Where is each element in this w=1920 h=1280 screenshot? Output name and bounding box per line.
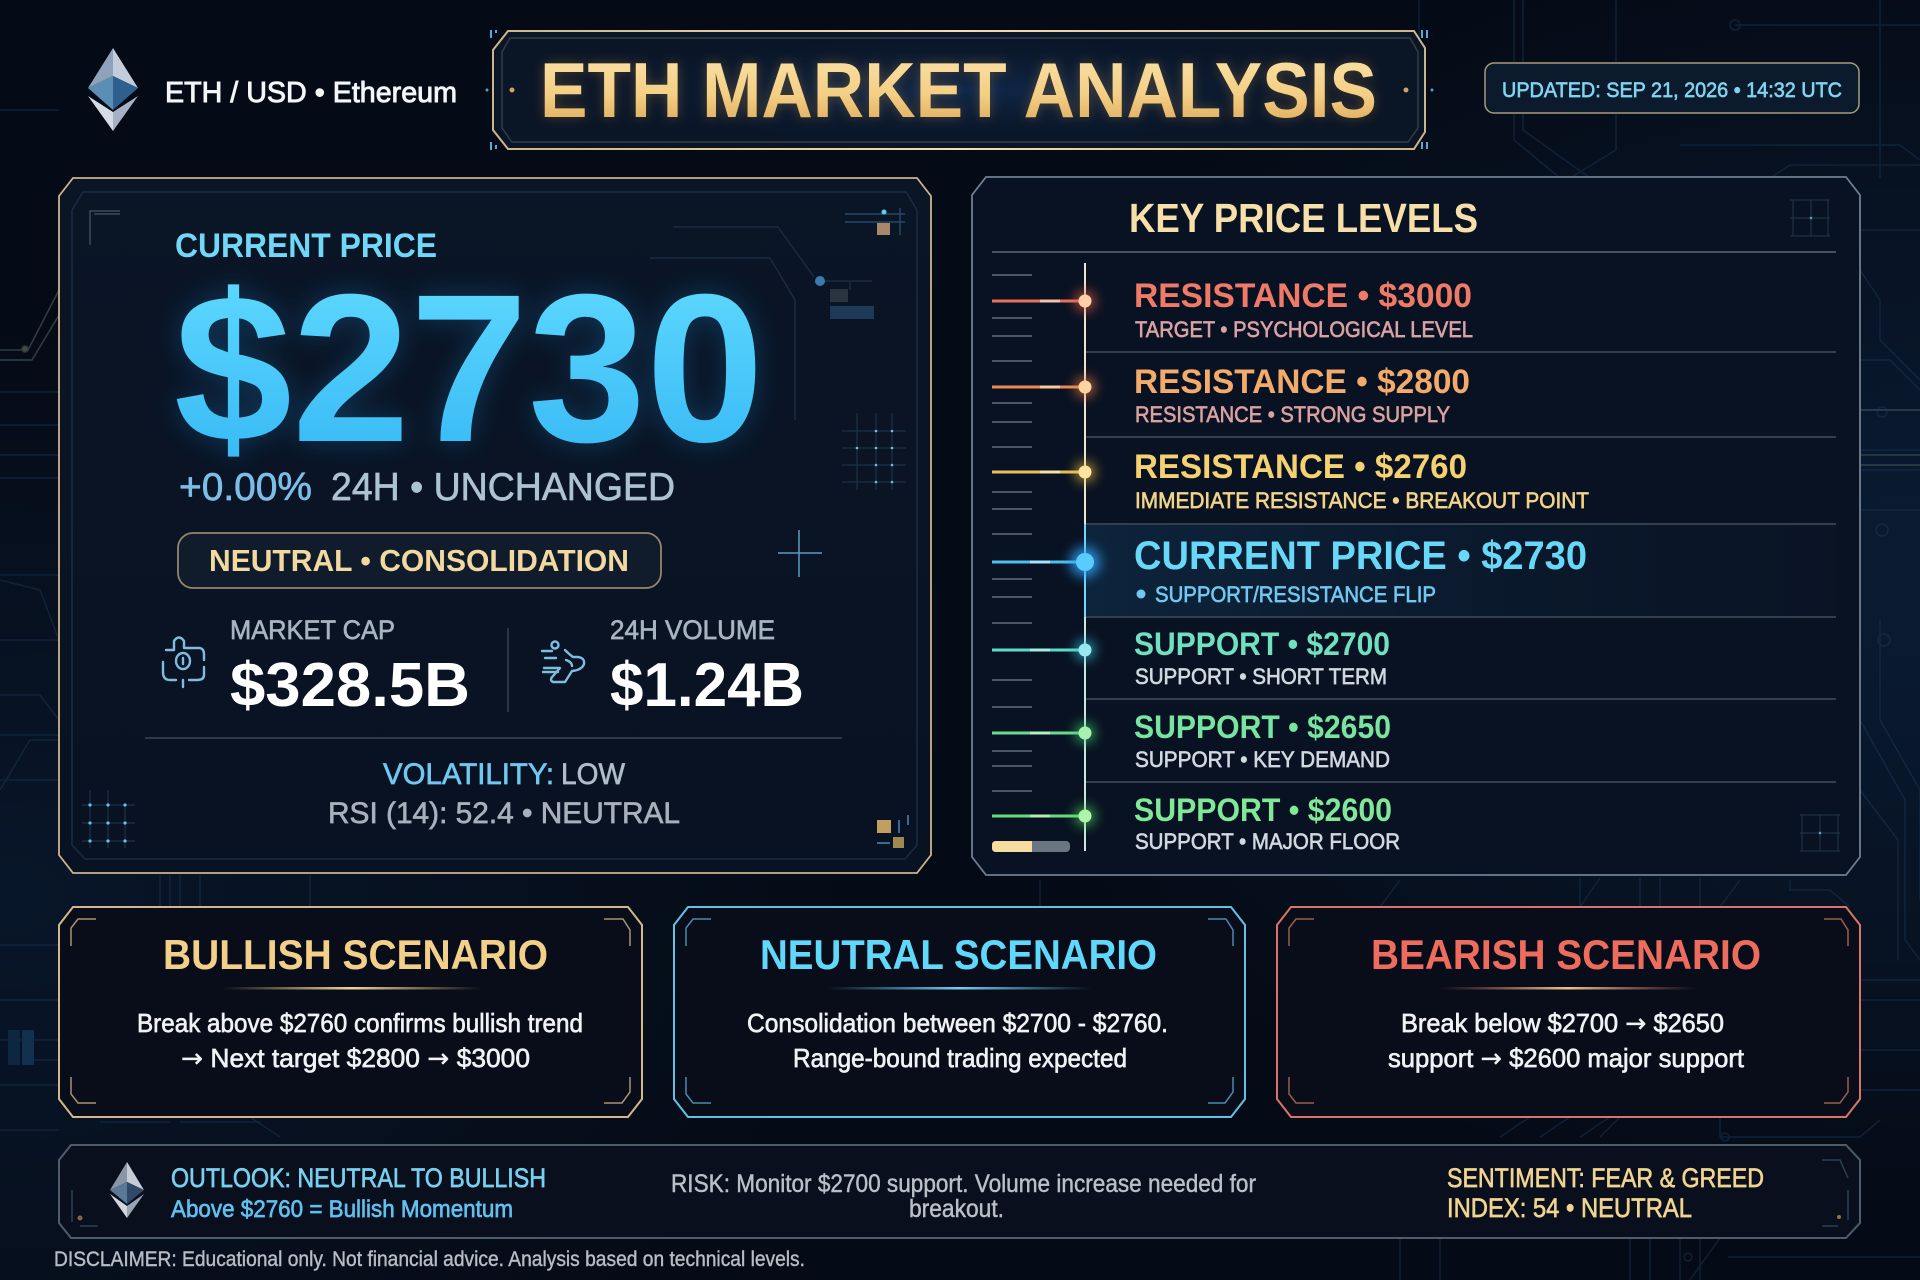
outlook text: Above $2760 = Bullish Momentum <box>171 1196 513 1223</box>
level: resistance 3000: RESISTANCE • $3000 <box>1134 277 1472 315</box>
level: current price: CURRENT PRICE • $2730 <box>1134 534 1587 578</box>
corner brackets <box>1289 919 1848 1103</box>
sentiment text: SENTIMENT: FEAR & GREED <box>1447 1163 1764 1193</box>
current row highlight <box>1086 524 1836 617</box>
badge: neutral consolidation: NEUTRAL • CONSOLIDATION <box>209 543 629 578</box>
sentiment text: INDEX: 54 • NEUTRAL <box>1447 1193 1692 1223</box>
level: resistance 2760 <box>992 448 1589 513</box>
icon: small Ethereum diamond <box>110 1162 144 1218</box>
market cap metric: $328.5B <box>230 651 470 720</box>
level: resistance 2800: RESISTANCE • STRONG SUPPLY <box>1135 402 1450 427</box>
level: support 2700: SUPPORT • $2700 <box>1134 626 1390 662</box>
title banner: ETH MARKET ANALYSIS <box>540 46 1377 134</box>
level: current price: SUPPORT/RESISTANCE FLIP <box>1155 582 1436 607</box>
body text: → Next target $2800 → $3000 <box>181 1043 530 1074</box>
level: support 2700 <box>992 626 1390 689</box>
price ladder ticks <box>992 275 1032 791</box>
range progress bar <box>992 841 1070 852</box>
level: resistance 2800 <box>992 363 1470 427</box>
title text: ETH MARKET ANALYSIS <box>540 46 1377 134</box>
heading: BULLISH SCENARIO <box>163 931 548 978</box>
24h change: +0.00% <box>179 466 312 509</box>
panel: outlook bar <box>59 1145 1860 1238</box>
updated timestamp badge <box>1485 63 1859 113</box>
label: current price: CURRENT PRICE <box>175 227 437 265</box>
outlook text <box>171 1163 546 1223</box>
risk text: breakout. <box>909 1195 1004 1223</box>
panel: neutral scenario <box>674 907 1245 1117</box>
level: support 2700: SUPPORT • SHORT TERM <box>1135 664 1387 689</box>
24h volume metric: $1.24B <box>610 651 804 720</box>
heading: BEARISH SCENARIO <box>1371 931 1761 978</box>
icon: market cap <box>163 638 204 687</box>
body text: Break above $2760 confirms bullish trend <box>137 1008 583 1038</box>
corner brackets <box>686 919 1233 1103</box>
level: support 2650: SUPPORT • $2650 <box>1134 709 1391 745</box>
row dividers <box>1085 352 1836 782</box>
level: current price <box>992 534 1587 607</box>
disclaimer: DISCLAIMER: Educational only. Not financial advice. Analysis based on technical levels. <box>54 1248 805 1271</box>
pair label: ETH / USD • Ethereum <box>165 77 457 109</box>
body text: Range-bound trading expected <box>793 1043 1127 1073</box>
panel: key price levels <box>972 177 1860 875</box>
24h volume metric: 24H VOLUME <box>610 615 775 645</box>
updated timestamp badge: UPDATED: SEP 21, 2026 • 14:32 UTC <box>1502 78 1842 102</box>
risk text: RISK: Monitor $2700 support. Volume increase needed for <box>671 1170 1256 1198</box>
RSI: RSI (14): 52.4 • NEUTRAL <box>328 797 680 830</box>
volatility: VOLATILITY: <box>383 758 554 791</box>
level: support 2650: SUPPORT • KEY DEMAND <box>1135 747 1390 772</box>
24h volume metric <box>610 615 804 720</box>
body text <box>747 1008 1168 1073</box>
level: support 2600: SUPPORT • $2600 <box>1134 792 1392 828</box>
body text <box>1388 1008 1745 1074</box>
risk text <box>671 1170 1256 1223</box>
24h change <box>179 466 675 509</box>
icon: volume <box>542 642 584 682</box>
divider between metrics <box>507 628 509 712</box>
panel decorations <box>82 208 908 848</box>
bar decorations <box>72 1160 1848 1226</box>
level: resistance 2800: RESISTANCE • $2800 <box>1134 363 1470 401</box>
body text: support → $2600 major support <box>1388 1043 1745 1074</box>
decorative grids <box>1790 200 1840 851</box>
level: resistance 3000 <box>992 277 1473 342</box>
outlook text: OUTLOOK: NEUTRAL TO BULLISH <box>171 1163 546 1193</box>
icon: Ethereum diamond <box>88 48 138 131</box>
price ladder axis <box>1084 263 1086 851</box>
panel: bullish scenario <box>59 907 642 1117</box>
level: support 2600 <box>992 792 1400 854</box>
header: ETH logo and pair label <box>88 48 457 131</box>
level: support 2600: SUPPORT • MAJOR FLOOR <box>1135 829 1400 854</box>
panel heading: KEY PRICE LEVELS <box>1129 195 1478 241</box>
corner brackets <box>71 919 630 1103</box>
decorative crosshair <box>778 530 822 577</box>
level: support 2650 <box>992 709 1391 772</box>
market cap metric: MARKET CAP <box>230 615 395 645</box>
24h change: 24H • UNCHANGED <box>331 466 675 509</box>
level: resistance 3000: TARGET • PSYCHOLOGICAL LEVEL <box>1135 317 1473 342</box>
big price: $2730 <box>174 250 764 486</box>
sentiment text <box>1447 1163 1764 1223</box>
panel: bearish scenario <box>1277 907 1860 1117</box>
body text: Break below $2700 → $2650 <box>1401 1008 1724 1039</box>
body text: Consolidation between $2700 - $2760. <box>747 1008 1168 1038</box>
body text <box>137 1008 583 1074</box>
level: resistance 2760: RESISTANCE • $2760 <box>1134 448 1467 486</box>
heading: NEUTRAL SCENARIO <box>760 931 1157 978</box>
level: resistance 2760: IMMEDIATE RESISTANCE • BREAKOUT POINT <box>1135 488 1589 513</box>
volatility: LOW <box>561 758 626 791</box>
panel: current price: $2730 <box>174 250 764 486</box>
panel: current price <box>59 178 931 873</box>
badge: neutral consolidation <box>178 533 661 588</box>
market cap metric <box>230 615 470 720</box>
title banner <box>486 30 1434 150</box>
